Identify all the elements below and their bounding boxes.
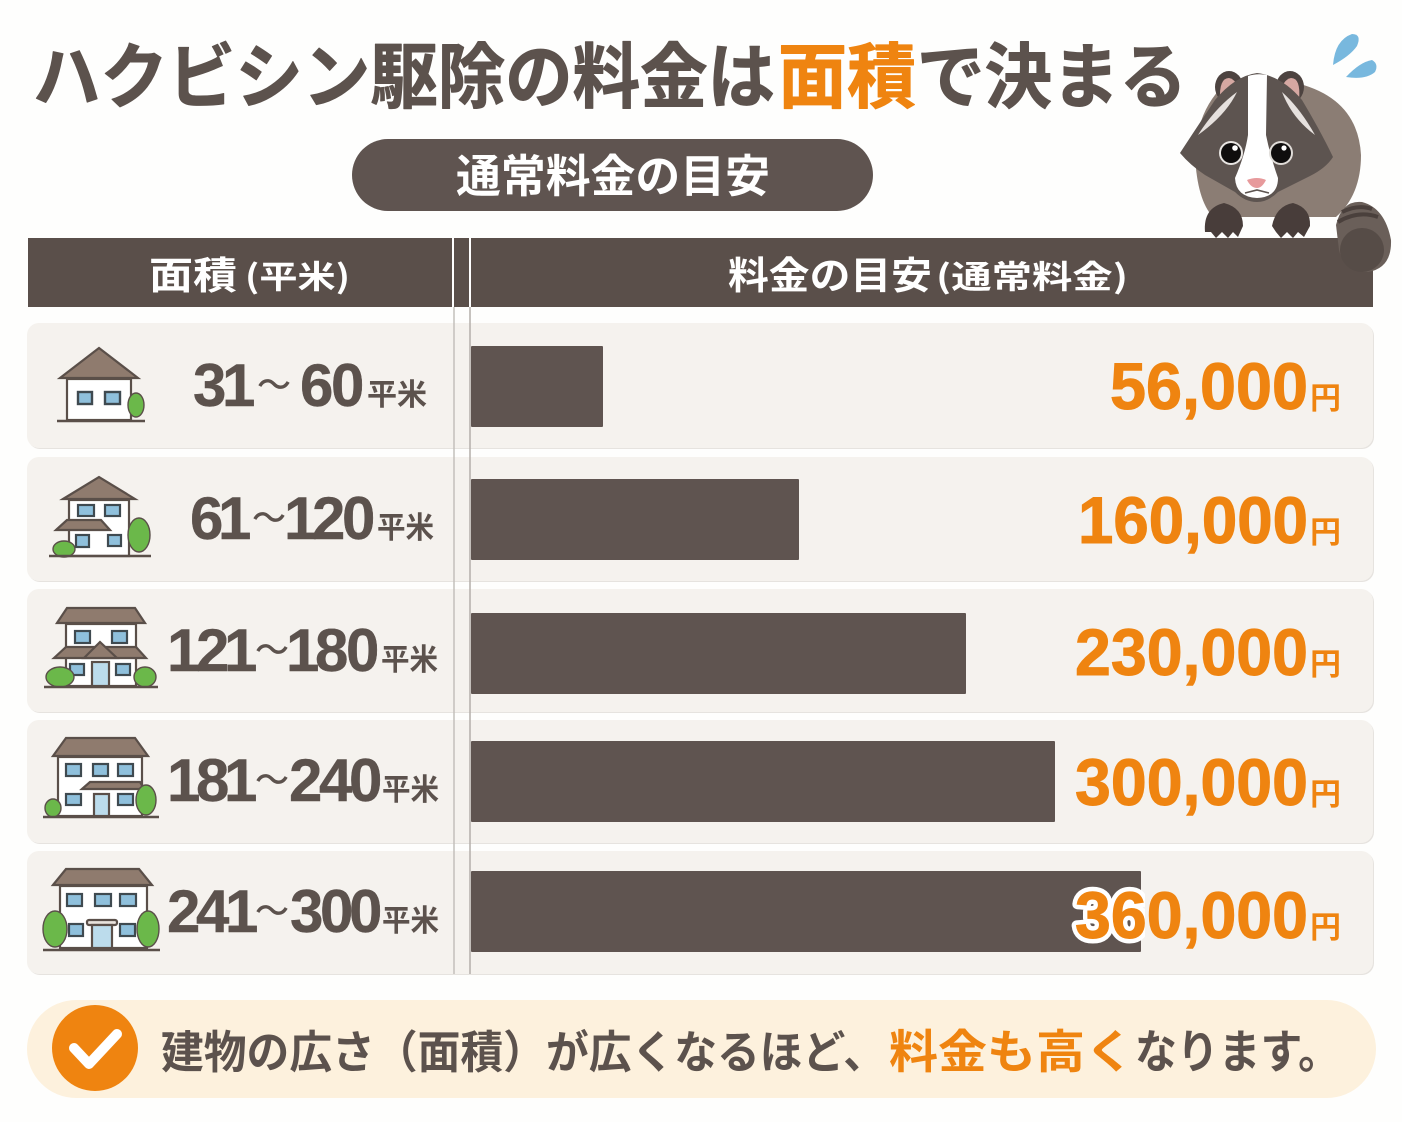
table header: 面積 bbox=[149, 245, 237, 300]
title bbox=[33, 21, 1187, 123]
range label: 120 bbox=[284, 485, 375, 552]
table header: 料金の目安 bbox=[728, 245, 932, 300]
title: ハクビシン駆除の料金は bbox=[33, 21, 775, 123]
icon: two-storey house bbox=[49, 477, 151, 557]
range label: 121 bbox=[167, 617, 257, 684]
bar bbox=[471, 871, 1141, 952]
value: 56,000 bbox=[1110, 349, 1308, 423]
range label: 〜 bbox=[255, 623, 289, 672]
value: 360,000 bbox=[1075, 878, 1308, 952]
range label bbox=[167, 617, 438, 684]
range label: 181 bbox=[167, 747, 257, 814]
range label bbox=[167, 878, 439, 945]
range label: 240 bbox=[289, 747, 382, 814]
range label bbox=[167, 747, 439, 814]
range label: 平米 bbox=[381, 635, 438, 679]
value: 160,000 bbox=[1078, 483, 1308, 557]
value: 230,000 bbox=[1075, 615, 1308, 689]
title: 面積 bbox=[778, 21, 916, 123]
value: 円 bbox=[1310, 639, 1341, 684]
table header: (平米) bbox=[245, 252, 350, 298]
range label: 241 bbox=[167, 878, 258, 945]
subtitle pill: 通常料金の目安 bbox=[456, 140, 770, 205]
bar bbox=[471, 346, 603, 427]
range label bbox=[190, 485, 434, 552]
table header bbox=[28, 238, 1373, 307]
range label: 平米 bbox=[367, 370, 427, 414]
bar bbox=[471, 479, 799, 560]
value: 300,000 bbox=[1075, 745, 1308, 819]
subtitle pill bbox=[352, 139, 873, 211]
icon: sweat drops bbox=[1333, 34, 1376, 78]
value: 円 bbox=[1310, 902, 1341, 947]
icon: check mark bbox=[52, 1005, 138, 1091]
range label: 〜 bbox=[252, 491, 286, 540]
icon: three-bay house bbox=[43, 738, 159, 817]
range label: 平米 bbox=[382, 765, 439, 809]
icon: small house bbox=[57, 348, 145, 421]
range label: 180 bbox=[286, 617, 379, 684]
bar bbox=[471, 741, 1055, 822]
bar bbox=[471, 613, 966, 694]
value: 円 bbox=[1310, 769, 1341, 814]
range label: 〜 bbox=[255, 884, 289, 933]
icon: largest house bbox=[43, 869, 160, 950]
range label: 60 bbox=[300, 352, 364, 419]
range label: 平米 bbox=[382, 896, 439, 940]
row 3: 121〜180平米 230,000円 bbox=[27, 589, 1374, 713]
row 1: 31〜60平米 56,000円 bbox=[27, 323, 1374, 449]
callout banner bbox=[27, 1000, 1376, 1098]
icon: larger house bbox=[44, 608, 158, 687]
row 4: 181〜240平米 300,000円 bbox=[27, 720, 1374, 844]
range label bbox=[193, 352, 427, 419]
row 5: 241〜300平米 360,000円 bbox=[27, 851, 1374, 975]
column dividers bbox=[454, 307, 470, 974]
title: で決まる bbox=[917, 21, 1187, 123]
range label: 〜 bbox=[257, 358, 291, 407]
range label: 〜 bbox=[255, 753, 289, 802]
table header: (通常料金) bbox=[936, 252, 1128, 298]
value: 円 bbox=[1310, 507, 1341, 552]
callout banner: 料金も高く bbox=[889, 1016, 1134, 1082]
callout banner: なります。 bbox=[1135, 1016, 1340, 1082]
range label: 31 bbox=[193, 352, 255, 419]
icon: masked palm civet mascot bbox=[1180, 71, 1391, 272]
range label: 61 bbox=[190, 485, 251, 552]
value: 360,000 bbox=[1075, 878, 1308, 952]
callout banner: 建物の広さ（面積）が広くなるほど、 bbox=[161, 1016, 886, 1081]
range label: 平米 bbox=[377, 503, 434, 547]
range label: 300 bbox=[290, 878, 382, 945]
value: 円 bbox=[1310, 373, 1341, 418]
row 2: 61〜120平米 160,000円 bbox=[27, 457, 1374, 582]
